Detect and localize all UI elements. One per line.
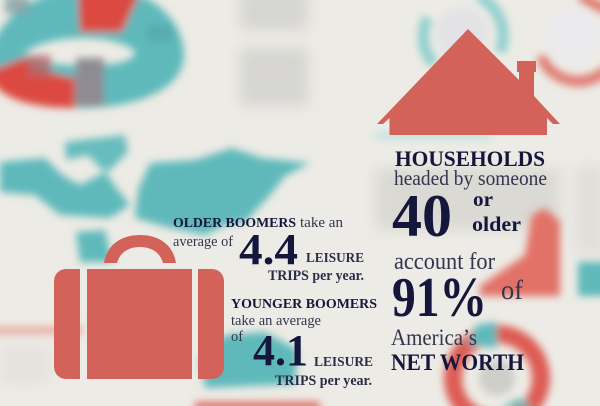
text: older boomers: average of bbox=[173, 234, 233, 250]
icon: house bbox=[377, 29, 560, 135]
text: older boomers: take an bbox=[300, 215, 344, 231]
text: younger boomers bbox=[231, 297, 377, 389]
blurred backdrop: right side charts bbox=[0, 208, 600, 406]
text: households: NET WORTH bbox=[391, 350, 524, 375]
blurred backdrop: world map bbox=[0, 135, 310, 388]
text: households: account for bbox=[394, 249, 495, 275]
text: younger boomers: TRIPS per year. bbox=[275, 373, 372, 389]
text: younger boomers: 4.1 bbox=[253, 326, 308, 375]
text: younger boomers: take an average bbox=[231, 313, 321, 329]
text: older boomers: OLDER BOOMERS bbox=[173, 216, 296, 231]
text: younger boomers: LEISURE bbox=[314, 355, 373, 370]
text: households: headed by someone bbox=[394, 166, 547, 190]
text: households: or bbox=[473, 187, 493, 211]
suitcase handle bbox=[104, 235, 176, 263]
text: older boomers: LEISURE bbox=[306, 251, 364, 266]
blurred backdrop: donut chart bbox=[0, 0, 184, 108]
text: older boomers bbox=[173, 215, 364, 284]
text: households: of bbox=[501, 275, 523, 305]
text: older boomers: TRIPS per year. bbox=[268, 268, 364, 284]
text: younger boomers: YOUNGER BOOMERS bbox=[231, 297, 377, 312]
text: households: America’s bbox=[391, 325, 477, 350]
text: households: HOUSEHOLDS bbox=[395, 146, 545, 171]
text: households: older bbox=[472, 212, 521, 236]
blurred backdrop: top right rings bbox=[375, 0, 600, 136]
text: households: 40 bbox=[392, 183, 452, 249]
text: younger boomers: of bbox=[231, 329, 243, 345]
icon: suitcase bbox=[54, 235, 224, 379]
text: households: 91% bbox=[392, 267, 487, 329]
suitcase body bbox=[54, 269, 224, 379]
text: older boomers: 4.4 bbox=[239, 225, 298, 274]
text: households bbox=[391, 146, 547, 375]
